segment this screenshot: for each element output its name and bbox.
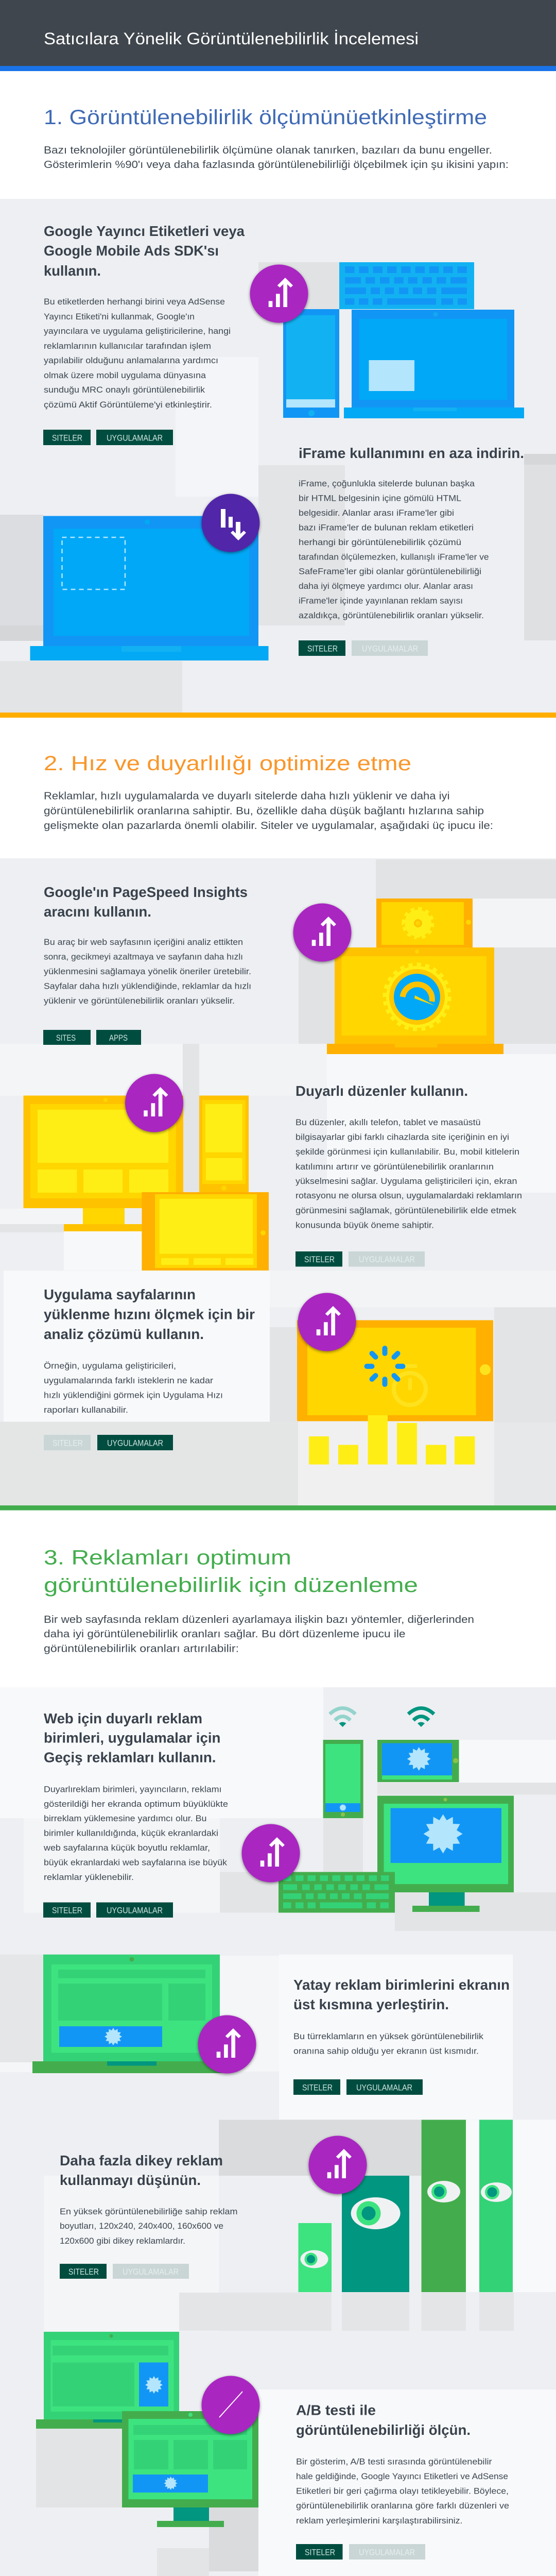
card body: vertical ads: En yüksek görüntülenebilirliğe sahip reklam [60, 2207, 238, 2216]
card body: Google Publisher Tags: olmak üzere mobil uygulama dünyasına [44, 371, 206, 380]
card body: A/B test: reklam yerleşimlerini karşılaştırabilirsiniz. [296, 2516, 462, 2526]
section 2 intro: gelişmekte olan pazarlarda önemli olabilir. Siteler ve uygulamalar, aşağıdaki üç ipucu ile: [44, 820, 493, 832]
card body: vertical ads [60, 2207, 238, 2246]
card body: responsive layouts [296, 1118, 522, 1230]
card heading: app load speed: analiz çözümü kullanın. [44, 1326, 204, 1342]
tags: sites active, apps disabled [296, 1251, 425, 1266]
tags: sites active, apps disabled: UYGULAMALAR [359, 1255, 415, 1264]
icon: wifi faded [329, 1708, 355, 1727]
icon: wifi solid [408, 1708, 434, 1727]
card heading: responsive ad units [44, 1710, 220, 1765]
tags: sites active, apps disabled: UYGULAMALAR [362, 644, 418, 653]
tags: sites and apps [293, 2079, 423, 2095]
illustration: keyboard, phone and laptop [283, 262, 524, 418]
card body: iFrame: iFrame, çoğunlukla sitelerde bulunan başka [299, 479, 475, 488]
card body: responsive layouts: Bu düzenler, akıllı telefon, tablet ve masaüstü [296, 1118, 481, 1127]
illustration: responsive devices [24, 1095, 269, 1270]
tags: sites and apps [43, 1902, 173, 1918]
card body: PageSpeed [44, 938, 251, 1006]
section 3 intro: Bir web sayfasında reklam düzenleri ayarlamaya ilişkin bazı yöntemler, diğerlerinden [44, 1614, 474, 1625]
card heading: responsive ad units: birimleri, uygulamalar için [44, 1730, 220, 1745]
card body: PageSpeed: Bu araç bir web sayfasının içeriğini analiz ettikten [44, 938, 243, 947]
section 3 intro: görüntülenebilirlik oranları artırılabilir: [44, 1643, 239, 1655]
card body: responsive ad units [43, 1785, 228, 1882]
card heading: PageSpeed: Google'ın PageSpeed Insights [44, 884, 248, 900]
card body: Google Publisher Tags [44, 297, 231, 410]
card heading: responsive layouts: Duyarlı düzenler kullanın. [296, 1083, 468, 1099]
card body: iFrame: daha iyi ölçmeye yardımcı olur. Alanlar arası [299, 582, 473, 591]
title: Satıcılara Yönelik Görüntülenebilirlik İncelemesi [44, 29, 419, 48]
icon: loading spinner [367, 1348, 403, 1384]
card body: Google Publisher Tags: yapılabilir olduğunu anlamalarına yardımcı [44, 356, 218, 365]
section 2 heading: 2. Hız ve duyarlılığı optimize etme [44, 752, 411, 775]
card heading: vertical ads: Daha fazla dikey reklam [60, 2153, 223, 2168]
card body: Google Publisher Tags: yayıncılara ve uygulama geliştiricilerine, hangi [44, 327, 231, 336]
card body: responsive layouts: konusunda büyük öneme sahiptir. [296, 1221, 434, 1230]
card heading: app load speed: Uygulama sayfalarının [44, 1286, 196, 1302]
card body: app load speed: uygulamalarında farklı isteklerin ne kadar [44, 1376, 214, 1385]
card heading: Google Publisher Tags [44, 223, 245, 279]
icon: laptop variant A [36, 2332, 180, 2429]
icon: keyboard [279, 1872, 395, 1912]
section divider: amber [0, 713, 556, 718]
card body: iFrame: azaldıkça, görüntülenebilirlik oranları yükselir. [299, 611, 484, 620]
icon: viewability up badge [242, 1824, 300, 1883]
card body: responsive ad units: birimler kullanıldığında, küçük ekranlardaki [44, 1829, 218, 1838]
card body: Google Publisher Tags: çözümü Aktif Görüntüleme'yi etkinleştirir. [44, 400, 212, 410]
card body: A/B test: Bir gösterim, A/B testi sırasında görüntülenebilir [296, 2458, 492, 2467]
tags: sites active, apps disabled: UYGULAMALAR [359, 2547, 415, 2557]
card body: Google Publisher Tags: Bu etiketlerden herhangi birini veya AdSense [44, 297, 225, 307]
section divider: green [0, 1505, 556, 1511]
card body: iFrame: bazı iFrame'ler de bulunan reklam etiketleri [299, 523, 474, 533]
card body: A/B test: görüntülenebilirlik oranlarına göre farklı düzenleri ve [296, 2501, 509, 2511]
panel: section 3 background [0, 1687, 556, 2576]
card heading: horizontal ad units: Yatay reklam birimlerini ekranın [293, 1977, 510, 1993]
card heading: vertical ads: kullanmayı düşünün. [60, 2172, 201, 2188]
tags: sites active, apps disabled: UYGULAMALAR [123, 2267, 179, 2277]
icon: laptop with gauge [327, 947, 503, 1054]
card body: iFrame: bir HTML belgesinin içine gömülü HTML [299, 494, 461, 503]
card body: PageSpeed: Sayfalar daha hızlı yüklendiğinde, reklamlar da hızlı [44, 982, 251, 991]
card body: iFrame: herhangi bir görüntülenebilirlik çözümü [299, 538, 461, 547]
icon: stopwatch [394, 1364, 426, 1405]
card body: Google Publisher Tags: sunduğu MRC onaylı görüntülenebilirlik [44, 385, 205, 395]
card body: Google Publisher Tags: reklamlarının kullanıcılar tarafından işlem [44, 342, 211, 351]
icon: viewability up badge [125, 1074, 183, 1132]
chart: load time bars [309, 1415, 475, 1464]
section 3 heading: 3. Reklamları optimum [44, 1547, 291, 1569]
card heading: vertical ads [60, 2153, 223, 2188]
section 1 intro: Bazı teknolojiler görüntülenebilirlik ölçümüne olanak tanırken, bazıları da bunu engeller. [44, 145, 492, 156]
bar: wide vertical ad [342, 2176, 409, 2292]
tags: sites active, apps disabled: SITELER [304, 1255, 335, 1264]
card heading: iFrame: iFrame kullanımını en aza indirin. [299, 445, 524, 461]
section 1 intro: Gösterimlerin %90'ı veya daha fazlasında görüntülenebilirliği ölçebilmek için şu ikisini yapın: [44, 159, 509, 171]
card heading: A/B test [296, 2402, 471, 2438]
tags: sites and apps [43, 430, 173, 445]
card body: iFrame: iFrame'ler içinde yayınlanan reklam sayısı [299, 597, 463, 606]
icon: monitor variant B [122, 2411, 258, 2527]
card body: app load speed: Örneğin, uygulama geliştiricileri, [44, 1361, 176, 1370]
tags: sites disabled, apps active [44, 1435, 173, 1450]
card heading: PageSpeed [44, 884, 248, 920]
card body: A/B test [296, 2458, 509, 2526]
card body: app load speed [44, 1361, 223, 1415]
icon: desktop monitor [377, 1796, 514, 1912]
icon: keyboard [339, 262, 474, 309]
icon: viewability up badge [198, 2015, 256, 2073]
tags: sites active, apps disabled [299, 640, 428, 656]
bar: smallest vertical ad [299, 2223, 332, 2292]
section 2 intro: Reklamlar, hızlı uygulamalarda ve duyarlı sitelerde daha hızlı yüklenir ve daha iyi [44, 790, 450, 802]
card body: iFrame: tarafından ölçülemezken, kullanışlı iFrame'ler ve [299, 552, 489, 562]
section 3 heading: görüntülenebilirlik için düzenleme [44, 1574, 418, 1597]
section 2 intro: görüntülenebilirlik oranlarına sahiptir. Bu, özellikle daha düşük bağlantı hızlarına sahip [44, 806, 484, 817]
panel: section 1 background [0, 199, 556, 713]
card body: responsive ad units: birreklam yüklemesine yardımcı olur. Bu [44, 1814, 207, 1823]
tags: sites and apps: SITELER [302, 2082, 333, 2093]
bar: narrow tall vertical ad [479, 2120, 513, 2292]
section 3 intro: daha iyi görüntülenebilirlik oranları sağlar. Bu dört düzenleme ipucu ile [44, 1629, 406, 1640]
card heading: Google Publisher Tags: kullanın. [44, 263, 101, 279]
card body: responsive layouts: bilgisayarlar gibi farklı cihazlarda site içeriğinin en iyi [296, 1132, 509, 1142]
tags: sites and apps: SITELER [52, 433, 82, 443]
card body: vertical ads: 120x600 gibi dikey reklamlardır. [60, 2236, 185, 2246]
card body: responsive layouts: rotasyonu ne olursa olsun, uygulamalardaki reklamların [296, 1191, 522, 1200]
icon: phone [323, 1740, 363, 1818]
section 3 heading [44, 1547, 418, 1597]
illustration: tablet with spinner and stopwatch [297, 1320, 493, 1421]
tags: sites and apps: UYGULAMALAR [107, 433, 163, 443]
illustration: speed gauge on tablet and laptop [327, 899, 503, 1054]
section 3 intro [44, 1614, 474, 1655]
illustration: A/B test devices [36, 2332, 258, 2527]
panel: section 2 background [0, 858, 556, 1505]
icon: phone [199, 1095, 249, 1193]
card body: responsive ad units: büyük ekranlardaki web sayfalarına ise büyük [44, 1858, 228, 1867]
icon: viewability up badge [309, 2136, 367, 2194]
card body: responsive layouts: şekilde görünmesi için kullanılabilir. Bu, mobil kitlelerin [296, 1147, 519, 1157]
chart: vertical ads with viewing eyes [299, 2120, 513, 2292]
card body: horizontal ad units [293, 2032, 484, 2056]
section 2 intro [44, 790, 493, 832]
card body: responsive layouts: yükselmesini sağlar. Uygulama geliştiricileri için, ekran [296, 1177, 517, 1186]
card body: PageSpeed: sonra, gecikmeyi azaltmaya ve sayfanın daha hızlı [44, 952, 243, 961]
card body: responsive layouts: görünmesini sağlamak, görüntülenebilirlik elde etmek [296, 1206, 517, 1215]
card body: iFrame: SafeFrame'ler gibi olanlar görüntülenebilirliği [299, 567, 481, 576]
icon: desktop monitor [24, 1095, 183, 1231]
tags: sites and apps (English): SITES [56, 1033, 76, 1043]
tags: sites disabled, apps active: UYGULAMALAR [107, 1438, 163, 1448]
card body: PageSpeed: yüklenir ve görüntülenebilirlik oranları yükselir. [44, 996, 235, 1006]
card body: A/B test: hale geldiğinde, Google Yayıncı Etiketleri ve AdSense [296, 2472, 508, 2481]
card heading: responsive ad units: Web için duyarlı reklam [44, 1710, 202, 1726]
card body: horizontal ad units: oranına sahip olduğu yer ekranın üst kısmıdır. [293, 2046, 479, 2056]
card heading: Google Publisher Tags: Google Mobile Ads SDK'sı [44, 243, 219, 259]
tags: sites active, apps disabled [60, 2264, 189, 2279]
icon: tablet with gear [376, 899, 473, 947]
card heading: responsive ad units: Geçiş reklamları kullanın. [44, 1750, 216, 1765]
section 1 intro [44, 145, 509, 171]
icon: purple viewability up badge [250, 265, 308, 323]
card body: responsive ad units: reklamlar yüklenebilir. [44, 1873, 134, 1882]
card heading: horizontal ad units: üst kısmına yerleştirin. [293, 1996, 449, 2012]
tags: sites disabled, apps active: SITELER [53, 1438, 83, 1448]
tags: sites and apps (English) [43, 1030, 141, 1045]
illustration: connected devices with ads [279, 1708, 514, 1912]
card heading: horizontal ad units [293, 1977, 510, 2012]
tags: sites and apps: UYGULAMALAR [356, 2082, 412, 2093]
card body: iFrame: belgesidir. Alanlar arası iFrame'ler gibi [299, 509, 454, 518]
icon: A/B slash badge [202, 2376, 259, 2434]
card body: Google Publisher Tags: Yayıncı Etiketi'ni kullanmak, Google'ın [44, 312, 195, 321]
icon: phone [283, 309, 339, 418]
bar: tall vertical ad [421, 2120, 466, 2292]
card body: horizontal ad units: Bu türreklamların en yüksek görüntülenebilirlik [293, 2032, 484, 2041]
tags: sites and apps: UYGULAMALAR [107, 1905, 163, 1916]
card heading: A/B test: görüntülenebilirliği ölçün. [296, 2422, 471, 2438]
icon: indigo viewability down badge [202, 494, 259, 552]
card heading: A/B test: A/B testi ile [296, 2402, 376, 2418]
icon: tablet [142, 1192, 269, 1270]
icon: viewability up badge [298, 1293, 356, 1351]
header banner [0, 0, 556, 71]
card body: A/B test: Etiketleri bir geri çağırma olayı tetikleyebilir. Böylece, [296, 2486, 509, 2496]
card heading: PageSpeed: aracını kullanın. [44, 904, 151, 920]
tags: sites active, apps disabled: SITELER [68, 2267, 99, 2277]
card body: app load speed: hızlı yüklendiğini görmek için Uygulama Hızı [44, 1391, 223, 1400]
illustration: laptop with top-of-screen ad [32, 1955, 227, 2073]
icon: viewability up badge [293, 904, 351, 961]
card body: PageSpeed: yüklenmesini sağlamaya yönelik öneriler üretebilir. [44, 967, 251, 976]
card body: responsive ad units: web sayfalarına küçük boyutlu reklamlar, [43, 1843, 210, 1853]
icon: laptop [344, 310, 524, 418]
card body: responsive ad units: gösterildiği her ekranda optimum büyüklükte [44, 1800, 228, 1809]
card body: app load speed: raporları kullanabilir. [44, 1405, 128, 1415]
card heading: app load speed: yüklenme hızını ölçmek için bir [44, 1307, 255, 1322]
tags: sites active, apps disabled: SITELER [305, 2547, 335, 2557]
section 1 heading: 1. Görüntülenebilirlik ölçümünüetkinleştirme [44, 106, 487, 129]
tags: sites and apps (English): APPS [109, 1033, 128, 1043]
tags: sites active, apps disabled: SITELER [307, 644, 338, 653]
tags: sites and apps: SITELER [52, 1905, 82, 1916]
card body: vertical ads: boyutları, 120x240, 240x400, 160x600 ve [60, 2222, 223, 2231]
card heading: Google Publisher Tags: Google Yayıncı Etiketleri veya [44, 223, 245, 239]
card body: responsive layouts: katılımını artırır ve görüntülenebilirlik oranlarının [296, 1162, 494, 1172]
icon: tablet [377, 1740, 459, 1782]
card heading: app load speed [44, 1286, 255, 1342]
card body: responsive ad units: Duyarlıreklam birimleri, yayıncıların, reklamı [44, 1785, 221, 1794]
illustration: laptop with dashed ad slot [30, 516, 269, 660]
tags: sites active, apps disabled [296, 2544, 425, 2560]
card body: iFrame [299, 479, 489, 620]
